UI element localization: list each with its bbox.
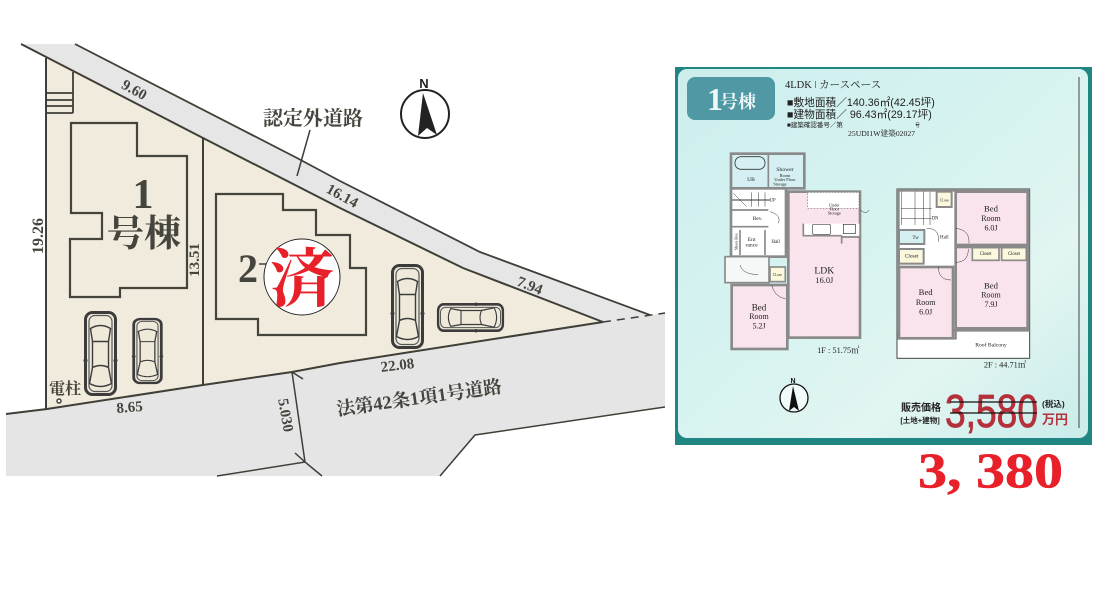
price block: 万円 [1042,412,1068,427]
property specifications: ■建物面積／ 96.43㎡(29.17坪) [787,108,932,121]
price block: 3,580 [945,385,1038,437]
second floor plan: Closet [980,252,992,257]
first floor plan: Under Floor [774,177,796,182]
site dimensions: 22.08 [380,356,415,376]
first floor plan: Cl.ose [773,273,782,277]
site dimensions: 7.94 [514,274,545,299]
site dimensions: 19.26 [30,218,47,254]
car 3 [390,266,424,348]
building number badge [687,77,775,120]
road name: Article 42 road: 法第42条1項1号道路 [335,376,504,420]
upper road: unapproved road [21,44,650,322]
building 1 label [107,172,181,255]
car 4 [438,303,503,332]
property specifications [785,79,935,138]
car 2 [132,319,163,383]
building number badge: 1 [707,81,723,117]
first floor plan: UB [747,177,755,183]
second floor plan [897,189,1030,370]
second floor plan: Roof Balcony [975,341,1007,348]
property specifications: 号 [915,123,920,129]
north compass small [780,378,808,412]
first floor plan: Shower [776,167,794,173]
first floor plan: rance [746,242,758,248]
first floor plan: Bev. [753,216,762,222]
first floor plan: LDK [814,266,834,277]
second floor plan: 6.0J [984,223,998,232]
building number badge: 号棟 [720,92,756,112]
first floor plan: Storage [773,182,787,187]
first floor plan: Shoes Box [734,233,739,250]
second floor plan: Tw [913,236,919,241]
first floor plan: Ent [748,237,756,243]
site dimensions: 16.14 [323,181,361,212]
site boundary lines [6,44,665,476]
second floor plan: Room [981,291,1002,300]
second floor plan: 6.0J [919,307,932,316]
road name: unapproved road: 認定外道路 [263,107,363,130]
second floor plan: DN [932,216,939,221]
second floor plan: Room [916,298,936,307]
first floor plan: Room [749,312,770,321]
first floor plan [725,154,869,355]
first floor plan: UP [770,199,776,204]
price block: 販売価格 [901,401,941,414]
sold stamp: 済 [270,244,334,315]
first floor plan: Floor [830,206,840,211]
property specifications: 4LDK ǀ カースペース [785,79,881,91]
lower road: Article 42 road [6,313,665,476]
site dimensions: 9.60 [119,77,149,104]
first floor plan: 16.0J [815,276,834,285]
site dimensions [30,77,545,433]
building 1 label: 1 [132,172,154,218]
north compass small: N [790,378,796,385]
north compass large [401,76,449,138]
car 1 [84,312,118,394]
site dimensions: 5.030 [274,397,296,433]
price block [900,385,1068,437]
second floor plan: Bed [984,204,999,214]
panel: building 1 floor plan card [675,67,1092,445]
property specifications: ■敷地面積／140.36㎡(42.45坪) [787,96,935,109]
property specifications: 25UDI1W建築02027 [848,128,915,138]
second floor plan: Hall [940,235,949,240]
second floor plan: 2F : 44.71㎡ [984,361,1027,370]
second floor plan: Closet [1008,252,1021,257]
second floor plan: Cl.ose [940,199,949,203]
utility pole label: 電柱 [49,379,81,398]
first floor plan: Room [780,173,791,178]
price block: (税込) [1042,399,1065,409]
first floor plan: Bed [752,302,767,312]
first floor plan: 5.2J [752,321,766,330]
second floor plan: Bed [919,287,933,297]
building 2 outline [216,194,366,335]
first floor plan: Hall [771,240,781,245]
property specifications: ■建築確認番号／第 [787,120,843,129]
north compass large: N [419,76,429,91]
lot: beige site area [46,58,603,409]
building 2 label: 2 [238,246,258,291]
price block: [土地+建物] [900,415,940,425]
site dimensions: 13.51 [187,243,203,277]
second floor plan: Room [981,214,1002,223]
second floor plan: 7.9J [984,300,998,309]
second floor plan: Bed [984,280,999,290]
site dimensions: 8.65 [116,399,143,417]
second floor plan: Closet [905,254,919,260]
building 1 outline [70,123,187,297]
revised price: 3, 380 [918,442,1063,498]
first floor plan: Under [829,202,840,207]
building 1 label: 号棟 [107,213,181,255]
first floor plan: 1F : 51.75㎡ [817,346,860,355]
first floor plan: Storage [828,210,841,215]
